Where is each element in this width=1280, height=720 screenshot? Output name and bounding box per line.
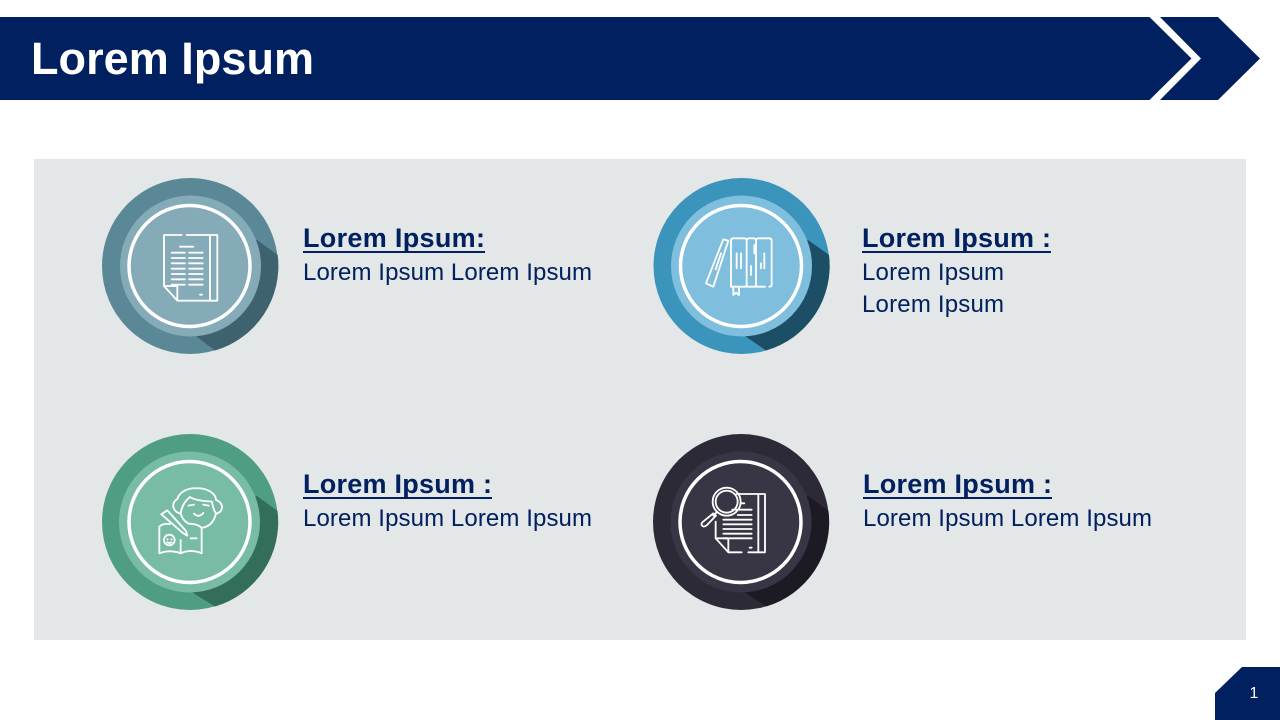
text block: bottom right xyxy=(863,469,1152,532)
text block: bottom right: Lorem Ipsum : xyxy=(863,469,1052,499)
panel: content background xyxy=(34,159,1246,640)
page number tab xyxy=(1215,667,1280,720)
icon badge: books xyxy=(654,178,830,354)
text block: bottom right: Lorem Ipsum Lorem Ipsum xyxy=(863,505,1152,532)
text block: top right: Lorem Ipsum xyxy=(862,259,1004,286)
text block: top right xyxy=(862,223,1051,318)
text block: top right: Lorem Ipsum : xyxy=(862,223,1051,253)
text block: bottom left: Lorem Ipsum Lorem Ipsum xyxy=(303,505,592,532)
icon badge: student writing xyxy=(102,434,278,610)
icon badge: document xyxy=(102,178,278,354)
page number tab: 1 xyxy=(1250,685,1259,702)
text block: bottom left xyxy=(303,469,592,532)
text block: top right: Lorem Ipsum xyxy=(862,291,1004,318)
header banner xyxy=(0,17,1260,100)
text block: top left: Lorem Ipsum: xyxy=(303,223,485,253)
text block: top left xyxy=(303,223,592,286)
icon badge: document with magnifier xyxy=(653,434,829,610)
title: Lorem Ipsum xyxy=(31,33,314,84)
text block: top left: Lorem Ipsum Lorem Ipsum xyxy=(303,259,592,286)
text block: bottom left: Lorem Ipsum : xyxy=(303,469,492,499)
